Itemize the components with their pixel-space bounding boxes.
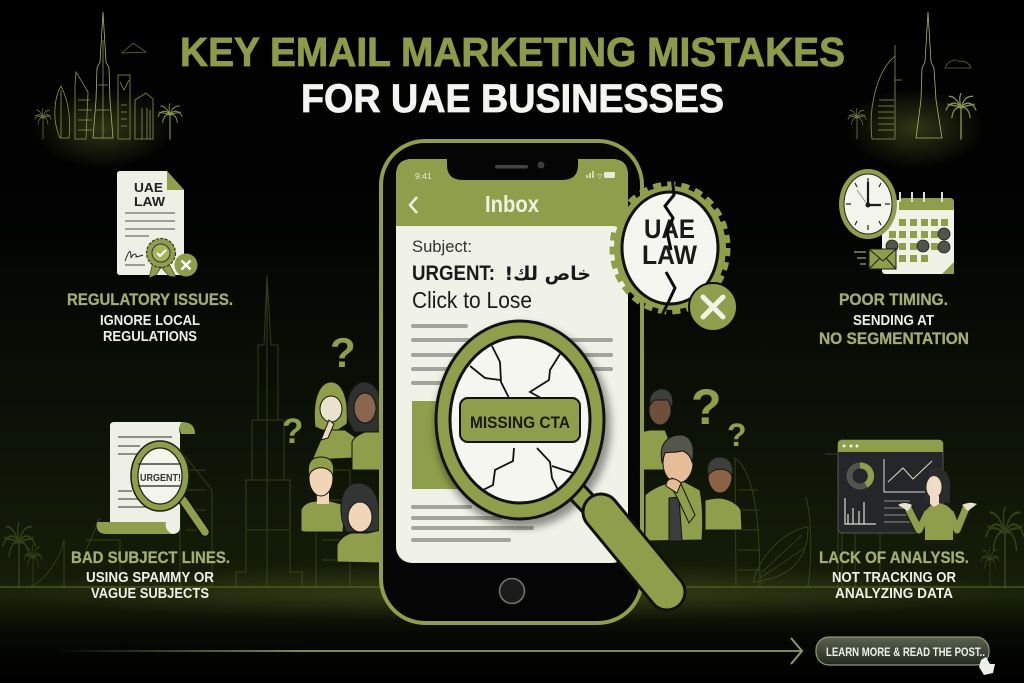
- text: not tracking or analyzing data: ANALYZING DATA: [835, 586, 953, 602]
- broken UAE law seal: [613, 176, 737, 331]
- button: learn more and read the post: LEARN MORE & READ THE POST..: [826, 647, 985, 659]
- text: not tracking or analyzing data: [832, 570, 956, 602]
- icon: law document: UAE: [134, 181, 163, 195]
- phone screen: [396, 159, 628, 563]
- lens cracks: [470, 346, 573, 490]
- people group: left: [282, 329, 382, 563]
- phone: [381, 141, 642, 623]
- text: ignore local regulations: [100, 313, 200, 345]
- panel: poor timing: [819, 169, 969, 348]
- icon: law document: [117, 171, 198, 278]
- icon: clock, calendar and envelope: [839, 169, 954, 274]
- skyline illustration: top left: [20, 12, 195, 168]
- people group: right: [640, 379, 747, 541]
- subject line text: خاص لك!: [504, 263, 591, 285]
- icon: scroll with magnifier: [97, 422, 205, 534]
- panel: bad subject lines: [71, 422, 230, 602]
- text: no segmentation: NO SEGMENTATION: [819, 329, 969, 348]
- icon: law document: LAW: [134, 195, 165, 209]
- person: blonde woman: [312, 382, 355, 460]
- seal text: LAW: [642, 240, 697, 270]
- seal text: UAE: [644, 214, 695, 244]
- missing CTA button: [460, 398, 580, 442]
- magnifier handle: [575, 490, 667, 592]
- olive content block: [412, 401, 472, 489]
- inbox header bar: 9:41: [415, 171, 432, 181]
- title: [180, 29, 845, 121]
- magnifier lens: [436, 321, 604, 519]
- panel: regulatory issues: [67, 171, 233, 345]
- person: thinking man: [645, 435, 703, 541]
- question mark: left large: ?: [330, 329, 356, 376]
- person: short-haired man: [301, 457, 345, 532]
- subject line text: URGENT:: [412, 262, 495, 285]
- inbox header bar: ⌔: [596, 172, 604, 181]
- person: long-haired woman: [337, 483, 381, 563]
- button: learn more and read the post: [816, 637, 995, 675]
- inbox header bar: Inbox: [485, 191, 539, 217]
- seal crack: [662, 176, 675, 315]
- person: dark-haired woman: [347, 382, 382, 470]
- text: not tracking or analyzing data: NOT TRACKING OR: [832, 570, 956, 586]
- text: sending at: SENDING AT: [853, 313, 934, 329]
- inbox header bar: [396, 159, 628, 226]
- title: FOR UAE BUSINESSES: [301, 77, 724, 121]
- subject line text: [412, 237, 591, 313]
- phone body: [381, 141, 642, 623]
- question mark: right small: ?: [727, 417, 747, 453]
- email body placeholder lines: [413, 326, 611, 540]
- missing CTA button: MISSING CTA: [470, 413, 570, 432]
- horizon glow: [0, 562, 1024, 622]
- question mark: left small: ?: [282, 412, 303, 451]
- title: KEY EMAIL MARKETING MISTAKES: [180, 29, 845, 75]
- heading: bad subject lines: BAD SUBJECT LINES.: [71, 548, 230, 567]
- person: top man: [640, 389, 673, 470]
- seal text: [642, 214, 697, 270]
- subject line text: Click to Lose: [412, 287, 532, 313]
- heading: lack of analysis: LACK OF ANALYSIS.: [819, 548, 969, 567]
- arrow: [55, 638, 802, 664]
- text: using spammy or vague subjects: [86, 570, 214, 602]
- text: ignore local regulations: IGNORE LOCAL: [100, 313, 200, 329]
- icon: scroll with magnifier: URGENT!: [140, 472, 181, 484]
- person: right man: [705, 457, 742, 530]
- text: using spammy or vague subjects: VAGUE SUBJECTS: [91, 586, 209, 602]
- text: ignore local regulations: REGULATIONS: [103, 329, 197, 345]
- icon: analytics dashboard with presenter: [838, 440, 977, 540]
- panel: lack of analysis: [819, 440, 977, 602]
- heading: regulatory issues: REGULATORY ISSUES.: [67, 290, 233, 309]
- heading: poor timing: POOR TIMING.: [839, 290, 948, 309]
- phone home button: [500, 578, 524, 604]
- icon: X badge: [689, 283, 737, 331]
- background skyline: left and right outlines: [3, 275, 1024, 587]
- icon: cursor hand: [979, 657, 995, 675]
- magnifying glass: [435, 321, 667, 592]
- text: using spammy or vague subjects: USING SPAMMY OR: [86, 570, 214, 586]
- question mark: right large: ?: [691, 379, 722, 435]
- subject line text: Subject:: [412, 237, 472, 256]
- skyline illustration: top right: [825, 12, 1005, 168]
